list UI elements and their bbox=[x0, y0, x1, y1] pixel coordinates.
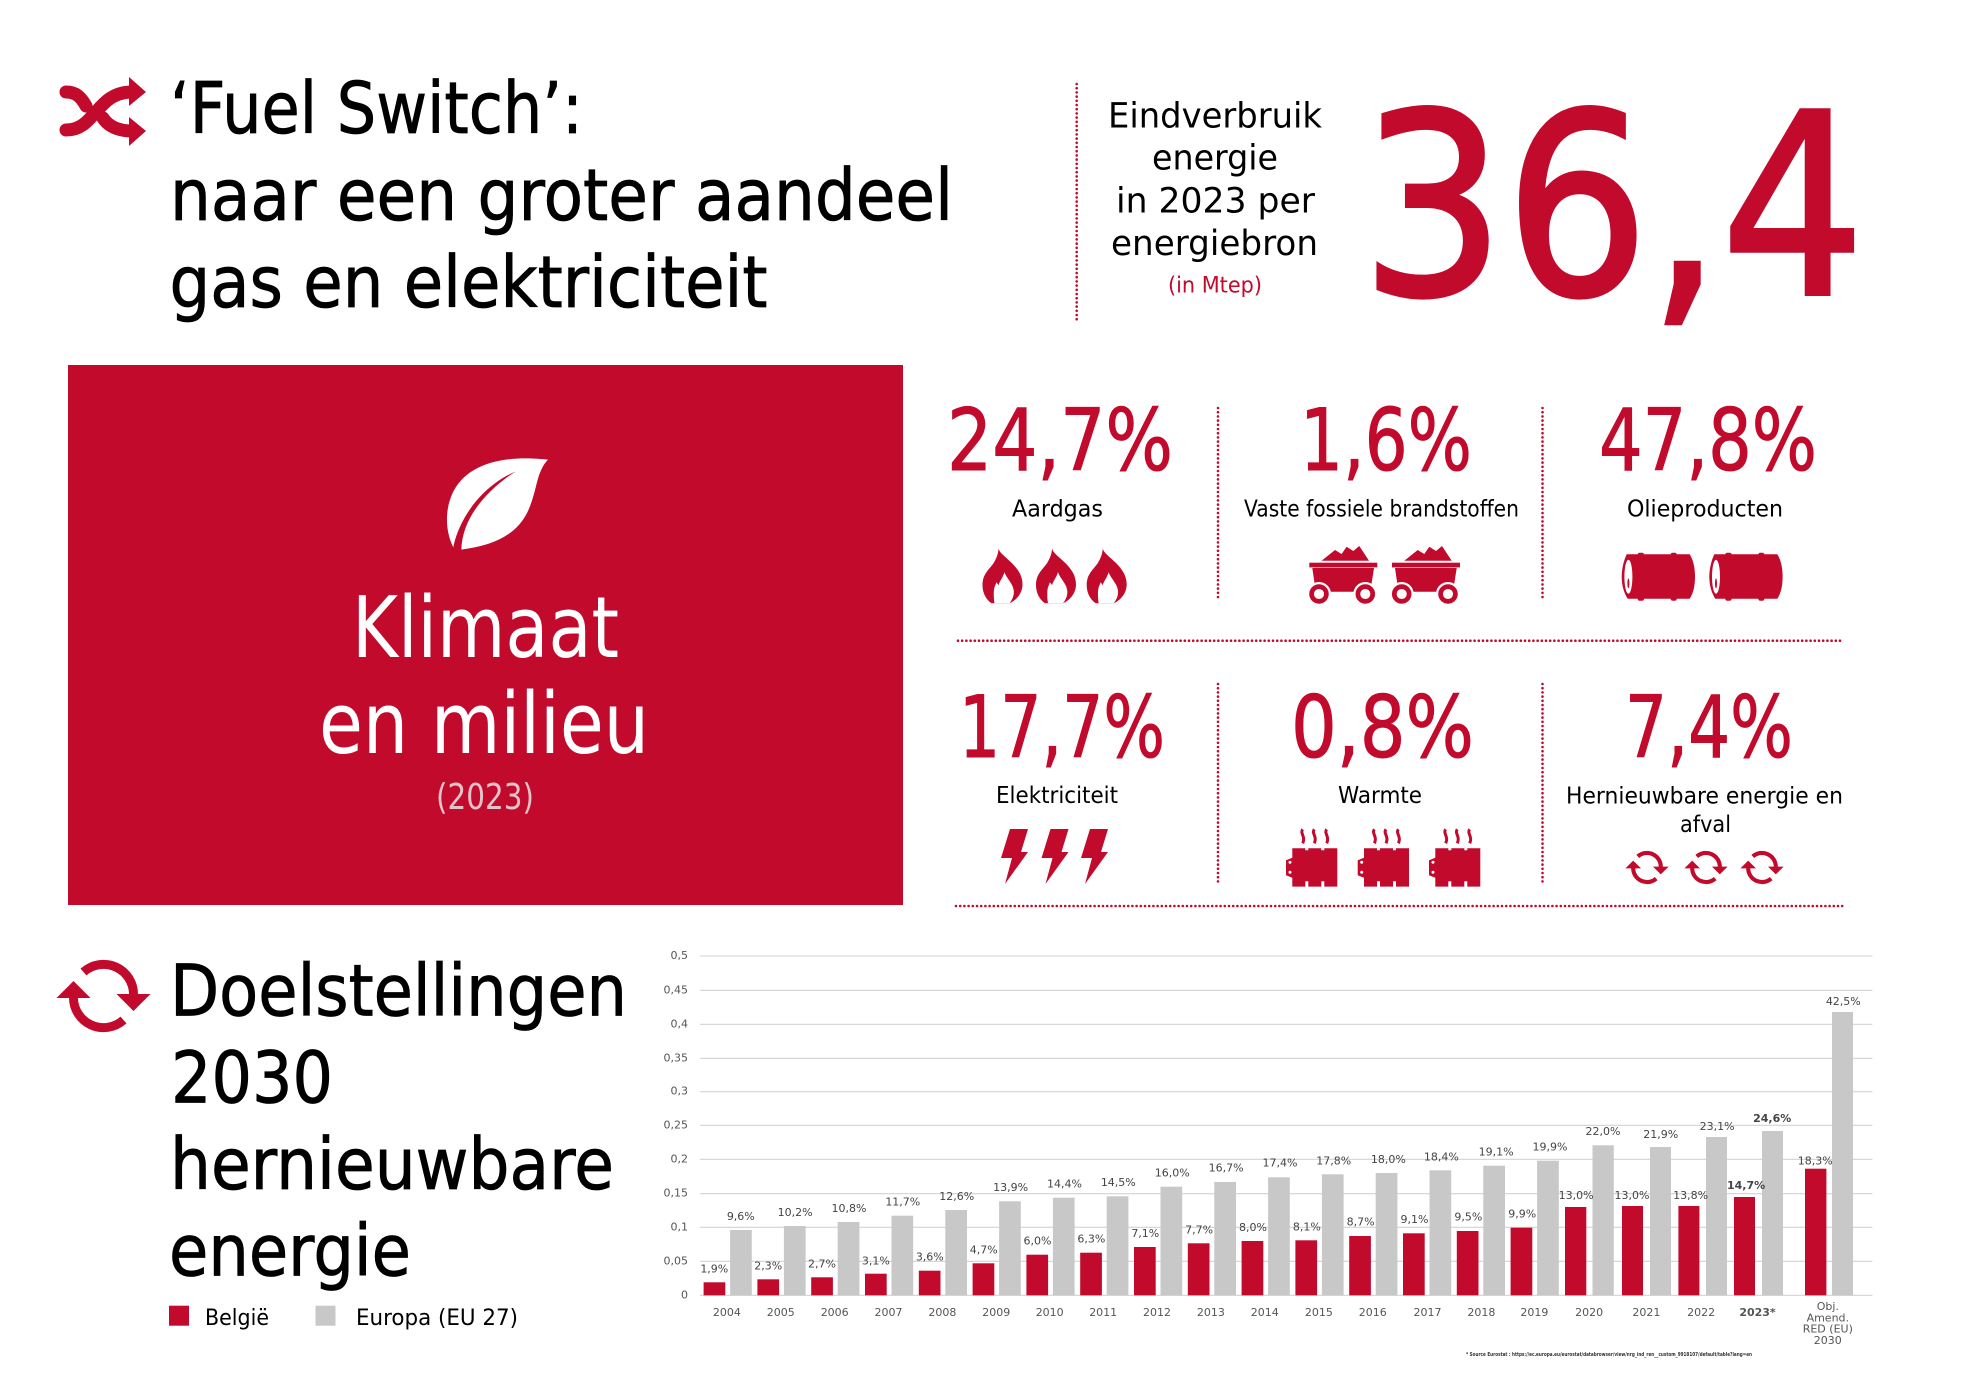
value labels: België: 8,0% bbox=[1239, 1221, 1267, 1234]
bar chart bbox=[664, 949, 1872, 1347]
x axis labels: 2022 bbox=[1687, 1306, 1715, 1319]
value labels: Europa: 23,1% bbox=[1700, 1120, 1735, 1133]
x axis labels: 2007 bbox=[874, 1306, 902, 1319]
value labels: Europa: 12,6% bbox=[939, 1190, 974, 1203]
panel: Klimaat en milieu: (2023) bbox=[436, 777, 534, 818]
y axis labels: 0 bbox=[681, 1288, 688, 1301]
legend: België bbox=[205, 1306, 269, 1331]
y axis labels: 0,4 bbox=[670, 1017, 688, 1030]
value labels: België: 3,1% bbox=[862, 1254, 890, 1267]
value labels: België: 7,1% bbox=[1131, 1227, 1159, 1240]
x axis labels: 2010 bbox=[1036, 1306, 1064, 1319]
value labels: Europa: 10,2% bbox=[778, 1206, 813, 1219]
value labels: België: 6,3% bbox=[1077, 1233, 1105, 1246]
value labels: Europa: 16,0% bbox=[1155, 1167, 1190, 1180]
x axis labels: 2008 bbox=[928, 1306, 956, 1319]
value labels: België: 9,9% bbox=[1508, 1208, 1536, 1221]
y axis labels: 0,15 bbox=[664, 1187, 688, 1200]
legend bbox=[169, 1306, 518, 1331]
y axis labels: 0,05 bbox=[664, 1254, 688, 1267]
x axis labels: 2009 bbox=[982, 1306, 1010, 1319]
value labels: Europa bbox=[727, 995, 1861, 1223]
x axis labels: 2020 bbox=[1575, 1306, 1603, 1319]
x axis labels: 2023* bbox=[1739, 1306, 1776, 1319]
text block: final energy consumption: Eindverbruik bbox=[1108, 96, 1323, 136]
legend: Europa (EU 27) bbox=[356, 1306, 518, 1331]
value labels: Europa: 9,6% bbox=[727, 1210, 755, 1223]
heading: Doelstellingen: 2030 bbox=[171, 1037, 333, 1120]
value labels: Europa: 19,9% bbox=[1533, 1140, 1567, 1153]
title: ‘Fuel Switch’: bbox=[170, 67, 583, 150]
icon: radiators bbox=[1286, 829, 1480, 887]
stat: Vaste fossiele brandstoffen: 1,6% bbox=[1300, 391, 1472, 491]
text block: final energy consumption: (in Mtep) bbox=[1168, 274, 1262, 299]
icon: shuffle arrows bbox=[66, 77, 146, 146]
y axis labels: 0,45 bbox=[664, 983, 688, 996]
value labels: Europa: 11,7% bbox=[885, 1195, 920, 1208]
stat: Vaste fossiele brandstoffen bbox=[1244, 391, 1519, 606]
stat: Aardgas bbox=[947, 391, 1173, 603]
value labels: België: 8,1% bbox=[1293, 1221, 1321, 1234]
stat: Hernieuwbare energie en afval: afval bbox=[1680, 812, 1731, 838]
stat: Vaste fossiele brandstoffen: Vaste fossiele brandstoffen bbox=[1244, 496, 1519, 522]
x axis labels: 2013 bbox=[1197, 1306, 1225, 1319]
stat: Hernieuwbare energie en afval: Hernieuwbare energie en bbox=[1566, 784, 1843, 810]
x axis labels: RED (EU) bbox=[1803, 1323, 1853, 1336]
value labels: België: 6,0% bbox=[1024, 1235, 1051, 1248]
value labels: België bbox=[700, 1154, 1833, 1275]
source note: * Source Eurostat : https://ec.europa.eu/eurostat/databrowser/view/nrg_ind_ren__custom_9918107/default/table?lang=en bbox=[1466, 1352, 1752, 1358]
x axis labels: 2005 bbox=[767, 1306, 795, 1319]
x axis labels: 2011 bbox=[1089, 1306, 1117, 1319]
value labels: België: 13,0% bbox=[1559, 1189, 1594, 1202]
bars: België bbox=[704, 1169, 1826, 1295]
stat: Aardgas: Aardgas bbox=[1012, 496, 1103, 522]
icon: cycle arrows bbox=[1625, 853, 1784, 882]
icon: flames bbox=[982, 548, 1127, 603]
icon: cycle arrows large bbox=[56, 964, 150, 1028]
stat: Olieproducten bbox=[1599, 391, 1817, 601]
value labels: Europa: 24,6% bbox=[1753, 1112, 1791, 1125]
value labels: Europa: 18,0% bbox=[1371, 1153, 1406, 1166]
icon: leaf bbox=[447, 458, 548, 550]
stat: Hernieuwbare energie en afval: 7,4% bbox=[1625, 678, 1793, 778]
value labels: Europa: 18,4% bbox=[1424, 1150, 1459, 1163]
value labels: België: 18,3% bbox=[1798, 1154, 1833, 1167]
value labels: Europa: 10,8% bbox=[832, 1202, 866, 1215]
text block: final energy consumption: in 2023 per bbox=[1116, 182, 1316, 222]
y axis labels: 0,25 bbox=[664, 1118, 688, 1131]
stat: Olieproducten: Olieproducten bbox=[1627, 496, 1783, 522]
value labels: België: 2,7% bbox=[808, 1257, 836, 1270]
value labels: België: 8,7% bbox=[1347, 1216, 1375, 1229]
x axis labels bbox=[713, 1300, 1853, 1347]
stat: Elektriciteit: 17,7% bbox=[959, 678, 1165, 778]
text block: final energy consumption: energiebron bbox=[1111, 224, 1318, 264]
value labels: België: 9,5% bbox=[1454, 1210, 1482, 1223]
x axis labels: 2016 bbox=[1359, 1306, 1387, 1319]
x axis labels: 2015 bbox=[1305, 1306, 1333, 1319]
x axis labels: 2017 bbox=[1414, 1306, 1442, 1319]
panel: Klimaat en milieu bbox=[68, 365, 903, 905]
icon: lightning bolts bbox=[1001, 829, 1108, 884]
title: gas en elektriciteit bbox=[170, 241, 768, 324]
stat: Warmte: Warmte bbox=[1338, 783, 1422, 809]
x axis labels: 2021 bbox=[1632, 1306, 1660, 1319]
x axis labels: 2018 bbox=[1467, 1306, 1495, 1319]
value labels: België: 1,9% bbox=[700, 1262, 728, 1275]
heading: Doelstellingen: energie bbox=[169, 1210, 411, 1293]
panel: Klimaat en milieu: en milieu bbox=[319, 675, 649, 774]
x axis labels: 2004 bbox=[713, 1306, 741, 1319]
y axis labels bbox=[664, 949, 688, 1301]
value labels: Europa: 14,4% bbox=[1047, 1178, 1082, 1191]
value labels: Europa: 14,5% bbox=[1101, 1176, 1136, 1189]
value labels: België: 7,7% bbox=[1185, 1223, 1213, 1236]
x axis labels: 2006 bbox=[821, 1306, 849, 1319]
value labels: Europa: 16,7% bbox=[1209, 1162, 1244, 1175]
text block: final energy consumption bbox=[1108, 96, 1323, 299]
x axis labels: 2014 bbox=[1251, 1306, 1279, 1319]
x axis labels: 2019 bbox=[1520, 1306, 1548, 1319]
big number: 36,4 bbox=[1361, 61, 1865, 354]
value labels: België: 2,3% bbox=[754, 1260, 782, 1273]
stat: Hernieuwbare energie en afval bbox=[1566, 678, 1843, 882]
value labels: Europa: 21,9% bbox=[1643, 1128, 1678, 1141]
stat: Elektriciteit bbox=[959, 678, 1165, 884]
heading: Doelstellingen: hernieuwbare bbox=[170, 1123, 614, 1206]
y axis labels: 0,35 bbox=[664, 1051, 688, 1064]
value labels: Europa: 17,4% bbox=[1263, 1157, 1297, 1170]
value labels: België: 3,6% bbox=[916, 1250, 944, 1263]
title: naar een groter aandeel bbox=[170, 154, 953, 237]
y axis labels: 0,1 bbox=[670, 1220, 688, 1233]
heading: Doelstellingen: Doelstellingen bbox=[170, 950, 627, 1033]
stat: Warmte bbox=[1286, 678, 1480, 887]
value labels: Europa: 19,1% bbox=[1479, 1146, 1514, 1159]
y axis labels: 0,5 bbox=[670, 949, 688, 962]
value labels: België: 4,7% bbox=[970, 1243, 998, 1256]
stat: Warmte: 0,8% bbox=[1291, 678, 1474, 778]
value labels: België: 9,1% bbox=[1401, 1213, 1428, 1226]
heading: Doelstellingen bbox=[169, 950, 627, 1293]
value labels: Europa: 22,0% bbox=[1586, 1125, 1620, 1138]
bars: Europa bbox=[730, 1012, 1853, 1295]
icon: oil barrels bbox=[1622, 553, 1783, 601]
y axis labels: 0,2 bbox=[670, 1152, 688, 1165]
x axis labels: 2030 bbox=[1814, 1334, 1842, 1347]
panel: Klimaat en milieu: Klimaat bbox=[352, 579, 619, 678]
x axis labels: 2012 bbox=[1143, 1306, 1171, 1319]
stat: Olieproducten: 47,8% bbox=[1599, 391, 1817, 491]
title bbox=[170, 67, 953, 324]
text block: final energy consumption: energie bbox=[1152, 138, 1278, 178]
x axis labels: Amend. bbox=[1807, 1311, 1849, 1324]
x axis labels: Obj. bbox=[1817, 1300, 1839, 1313]
y axis labels: 0,3 bbox=[670, 1085, 688, 1098]
stat: Aardgas: 24,7% bbox=[947, 391, 1173, 491]
value labels: België: 13,0% bbox=[1615, 1189, 1649, 1202]
value labels: Europa: 13,9% bbox=[993, 1181, 1028, 1194]
value labels: Europa: 17,8% bbox=[1316, 1154, 1351, 1167]
value labels: Europa: 42,5% bbox=[1826, 995, 1861, 1008]
stat: Elektriciteit: Elektriciteit bbox=[996, 783, 1118, 809]
value labels: België: 14,7% bbox=[1727, 1179, 1765, 1192]
value labels: België: 13,8% bbox=[1673, 1189, 1708, 1202]
icon: coal carts bbox=[1307, 546, 1460, 606]
